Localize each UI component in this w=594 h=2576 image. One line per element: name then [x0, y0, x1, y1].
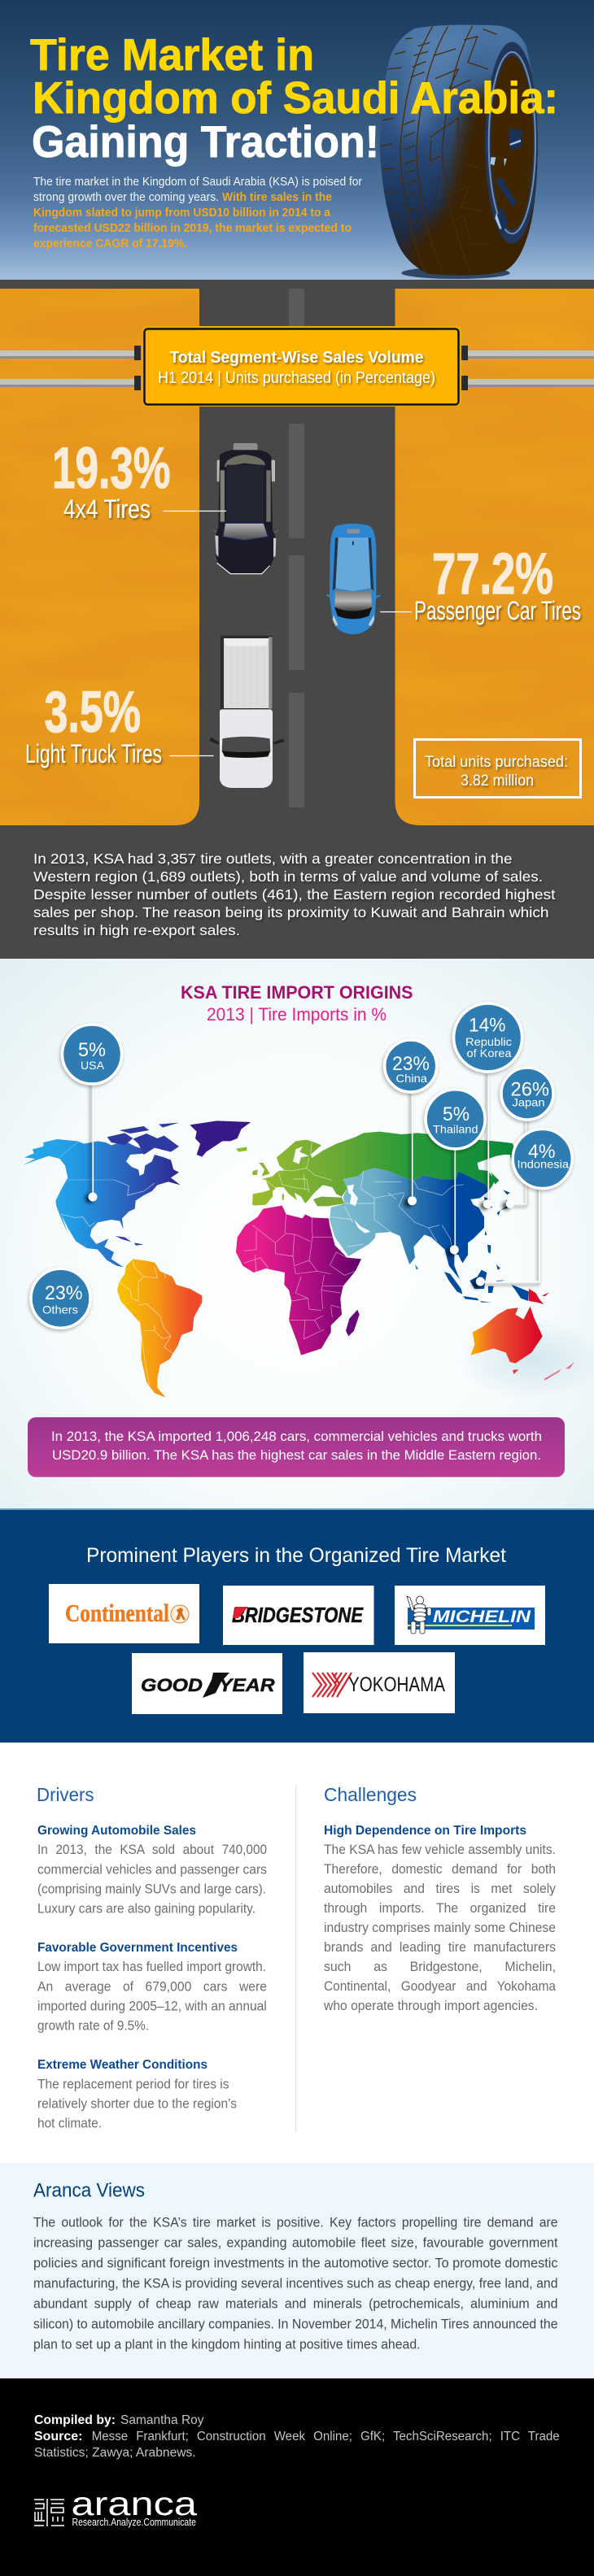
- title: Tire Market in: [30, 29, 314, 80]
- column: challenges: [323, 1784, 556, 2013]
- credits: [34, 2413, 560, 2460]
- credits: Statistics; Zawya; Arabnews.: [34, 2446, 196, 2460]
- text block: outlook: policies and significant foreign investments in the automotive sector. To promote domestic: [33, 2256, 558, 2270]
- credits: Compiled by:: [34, 2413, 116, 2427]
- bubble: Republic of Korea: Republic: [465, 1035, 512, 1048]
- intro text block: The tire market in the Kingdom of Saudi Arabia (KSA) is poised for: [33, 176, 362, 189]
- text block: outlook: increasing passenger car sales, expanding automobile fleet size, favourable government: [33, 2236, 558, 2251]
- column: challenges: who operate through import agencies.: [323, 1998, 538, 2013]
- column: challenges: The KSA has few vehicle assembly units.: [324, 1842, 556, 1857]
- column: challenges: such as Bridgestone, Michelin,: [324, 1959, 556, 1974]
- column: drivers: [37, 1784, 267, 2130]
- bubble: Others: Others: [42, 1303, 78, 1316]
- title: Gaining Traction!: [32, 116, 379, 167]
- column: challenges: brands and leading tire manufacturers: [324, 1939, 556, 1955]
- driver: growing automobile sales: In 2013, the KSA sold about 740,000: [37, 1842, 267, 1857]
- logo: Bridgestone: [223, 1586, 374, 1645]
- guard rails: [0, 346, 594, 390]
- intro text block: experience CAGR of 17.19%.: [33, 237, 187, 250]
- label: 19.3% 4x4 Tires: [52, 437, 226, 524]
- panel: drivers and challenges: [0, 1743, 594, 2163]
- column: challenges: through imports. The organized tire: [324, 1900, 556, 1916]
- panel: footer: [0, 2378, 594, 2576]
- logo: aranca: Research.Analyze.Communicate: [72, 2517, 196, 2528]
- intro text block: With tire sales in the: [222, 191, 332, 204]
- logo: aranca: [34, 2485, 197, 2528]
- icon: blue passenger car: [326, 524, 380, 634]
- text block: outlets: Western region (1,689 outlets), both in terms of value and volume of sales.: [33, 868, 543, 885]
- bubble: Others: [31, 1268, 90, 1328]
- panel: road and segment sales: [0, 280, 594, 959]
- road sign: H1 2014 | Units purchased (in Percentage): [158, 369, 435, 387]
- column: challenges: Challenges: [324, 1784, 417, 1805]
- text block: outlets: Despite lesser number of outlets (461), the Eastern region recorded highest: [33, 886, 556, 903]
- icon: white light truck: [209, 636, 284, 788]
- bubble: China: [385, 1040, 437, 1092]
- intro text block: forecasted USD22 billion in 2019, the market is expected to: [33, 222, 352, 235]
- bubble: Japan: Japan: [513, 1096, 545, 1109]
- bubble: Republic of Korea: of Korea: [467, 1046, 512, 1060]
- text block: outlook: abundant supply of cheap raw materials and minerals (petrochemicals, aluminium and: [33, 2297, 558, 2312]
- sand left: [0, 289, 199, 825]
- driver: government incentives: Low import tax has fuelled import growth.: [37, 1959, 266, 1974]
- intro text block: strong growth over the coming years.: [33, 191, 219, 204]
- bubble: Others: 23%: [45, 1282, 83, 1304]
- world map: Americas: [22, 1120, 251, 1397]
- text block: outlets: [33, 851, 556, 938]
- panel: import origins map: [0, 959, 594, 1510]
- callout: total units: [415, 740, 581, 797]
- credits: Source:: [34, 2430, 83, 2443]
- credits: Messe Frankfurt; Construction Week Online; GfK; TechSciResearch; ITC Trade: [92, 2430, 560, 2443]
- driver: weather: relatively shorter due to the region’s: [37, 2095, 237, 2111]
- text block: outlets: In 2013, KSA had 3,357 tire outlets, with a greater concentration in the: [33, 851, 513, 867]
- logo: Goodyear: GOOD: [141, 1675, 203, 1695]
- road sign: Total Segment-Wise Sales Volume: [169, 349, 423, 367]
- column: drivers: Drivers: [37, 1784, 94, 1805]
- label: 77.2% Passenger Car Tires: [380, 542, 581, 625]
- panel: prominent players: [0, 1510, 594, 1743]
- bubble: Japan: [501, 1068, 553, 1120]
- column: challenges: industry comprises mainly some Chinese: [324, 1920, 556, 1935]
- sand right: [395, 289, 594, 825]
- bubble: USA: [62, 1025, 122, 1084]
- road sign: [142, 326, 461, 407]
- column: challenges: High Dependence on Tire Imports: [324, 1824, 526, 1838]
- bubble: China: China: [395, 1072, 427, 1085]
- title: Kingdom of Saudi Arabia:: [33, 72, 558, 123]
- driver: government incentives: An average of 679,000 cars were: [37, 1978, 267, 1994]
- text block: outlook: plan to set up a plant in the kingdom hinting at positive times ahead.: [33, 2337, 420, 2352]
- label: 19.3% 4x4 Tires: 4x4 Tires: [63, 494, 151, 524]
- callout: car imports: [28, 1417, 565, 1477]
- bubble: Japan: 26%: [511, 1078, 549, 1101]
- heading: KSA TIRE IMPORT ORIGINS: [181, 982, 413, 1003]
- bubble: Indonesia: [513, 1129, 572, 1189]
- heading: 2013 | Tire Imports in %: [207, 1004, 387, 1025]
- text block: outlook: The outlook for the KSA’s tire market is positive. Key factors propelling tire demand are: [33, 2215, 558, 2230]
- label: 19.3% 4x4 Tires: 19.3%: [52, 437, 171, 501]
- driver: growing automobile sales: Growing Automobile Sales: [37, 1824, 196, 1838]
- bubble: Indonesia: 4%: [528, 1141, 555, 1163]
- driver: weather: [37, 2058, 237, 2130]
- logo: Michelin: [395, 1586, 545, 1645]
- logo: Continental: Continental: [65, 1599, 169, 1627]
- panel: Aranca views: Aranca Views: [33, 2180, 145, 2202]
- icon: black 4x4: [213, 443, 279, 575]
- logo: Continental: [49, 1584, 199, 1643]
- icon: tire: [380, 25, 548, 286]
- callout: car imports: In 2013, the KSA imported 1,006,248 cars, commercial vehicles and trucks worth: [51, 1429, 542, 1444]
- driver: government incentives: growth rate of 9.5%.: [37, 2017, 149, 2033]
- label: 77.2% Passenger Car Tires: 77.2%: [432, 542, 553, 607]
- column: challenges: Therefore, domestic demand for both: [324, 1861, 556, 1877]
- text block: outlook: manufacturing, the KSA is providing several incentives such as cheap energy, free land, and: [33, 2276, 558, 2291]
- label: 3.5% Light Truck Tires: Light Truck Tires: [25, 739, 162, 768]
- road centre dashes: [289, 289, 304, 807]
- bubble: USA: USA: [81, 1059, 105, 1072]
- callout: car imports: USD20.9 billion. The KSA has the highest car sales in the Middle Eastern region.: [52, 1448, 541, 1463]
- panel: header: [0, 0, 594, 286]
- callout: total units: 3.82 million: [461, 772, 534, 790]
- column: challenges: automobiles and tires is met solely: [324, 1881, 556, 1896]
- driver: growing automobile sales: (comprising mainly SUVs and large cars).: [37, 1881, 266, 1896]
- bubble: USA: 5%: [78, 1039, 106, 1061]
- driver: weather: hot climate.: [37, 2115, 102, 2130]
- driver: weather: Extreme Weather Conditions: [37, 2058, 207, 2072]
- heading: Prominent Players in the Organized Tire Market: [86, 1544, 506, 1567]
- driver: growing automobile sales: Luxury cars are also gaining popularity.: [37, 1900, 256, 1916]
- label: 3.5% Light Truck Tires: [25, 681, 213, 768]
- driver: weather: The replacement period for tires is: [37, 2076, 229, 2091]
- logo: Michelin: MICHELIN: [433, 1608, 531, 1626]
- logo: Yokohama: YOKOHAMA: [348, 1673, 445, 1696]
- text block: outlets: results in high re-export sales.: [33, 922, 240, 938]
- bubble: Thailand: 5%: [443, 1103, 470, 1125]
- bubble: Thailand: Thailand: [433, 1122, 478, 1135]
- callout: total units: Total units purchased:: [425, 754, 568, 771]
- world map: Europe, Africa, Asia, Australia: [236, 1132, 574, 1380]
- text block: outlook: [33, 2215, 558, 2352]
- bubble: Republic of Korea: 14%: [469, 1015, 506, 1036]
- logo: Goodyear: [132, 1653, 282, 1714]
- logo: aranca: aranca: [72, 2485, 197, 2522]
- driver: government incentives: [37, 1941, 267, 2033]
- column: challenges: Continental, Goodyear and Yokohama: [324, 1978, 556, 1994]
- panel: Aranca views: [0, 2163, 594, 2378]
- text block: outlets: sales per shop. The reason being its proximity to Kuwait and Bahrain which: [33, 904, 548, 920]
- title: [30, 29, 558, 167]
- heading: [181, 982, 413, 1025]
- bubble: Indonesia: Indonesia: [518, 1158, 569, 1171]
- driver: growing automobile sales: commercial vehicles and passenger cars: [37, 1861, 267, 1877]
- driver: government incentives: Favorable Government Incentives: [37, 1941, 238, 1955]
- intro text block: Kingdom slated to jump from USD10 billion in 2014 to a: [33, 207, 331, 220]
- intro text block: [33, 176, 362, 250]
- text block: outlook: silicon) to automobile ancillary companies. In November 2014, Michelin Tires announced the: [33, 2317, 558, 2332]
- logo: Goodyear: YEAR: [219, 1675, 275, 1695]
- logo: Bridgestone: BRIDGESTONE: [232, 1603, 364, 1627]
- driver: government incentives: imported during 2005–12, with an annual: [37, 1998, 267, 2013]
- label: 3.5% Light Truck Tires: 3.5%: [44, 681, 141, 745]
- driver: growing automobile sales: [37, 1824, 267, 1916]
- callout lines: [85, 1073, 540, 1288]
- bubble: China: 23%: [392, 1053, 430, 1075]
- bubble: Thailand: [426, 1090, 485, 1149]
- bubble: Republic of Korea: [454, 1003, 522, 1072]
- logo: Yokohama: [304, 1652, 455, 1713]
- credits: Samantha Roy: [120, 2413, 204, 2427]
